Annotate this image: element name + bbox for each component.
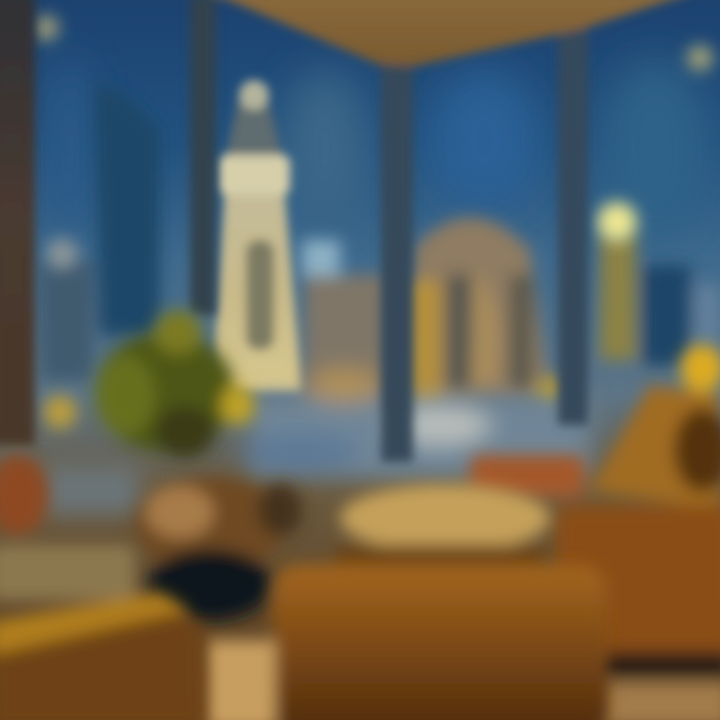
distant skyline — [42, 80, 720, 405]
dome building — [410, 218, 548, 400]
white clock tower — [212, 80, 302, 392]
centre table and chair — [205, 484, 607, 720]
pillar 3 — [381, 62, 413, 462]
yellow tower — [600, 235, 636, 360]
pillar 4 — [558, 25, 588, 425]
left pillar — [0, 0, 35, 445]
left distant building — [42, 260, 92, 380]
table with items — [135, 477, 302, 621]
plant — [95, 310, 255, 458]
window frame — [0, 0, 700, 462]
dark blue skyscraper — [95, 80, 160, 335]
right dark building — [642, 265, 690, 365]
glowing lights — [33, 15, 713, 429]
right sofa — [470, 344, 720, 720]
waterfront — [40, 367, 590, 515]
pillar 2 — [190, 0, 216, 315]
lighter sky haze — [45, 60, 710, 240]
ceiling — [205, 0, 700, 66]
left chair and table — [0, 455, 205, 720]
mid distant buildings — [305, 275, 390, 405]
